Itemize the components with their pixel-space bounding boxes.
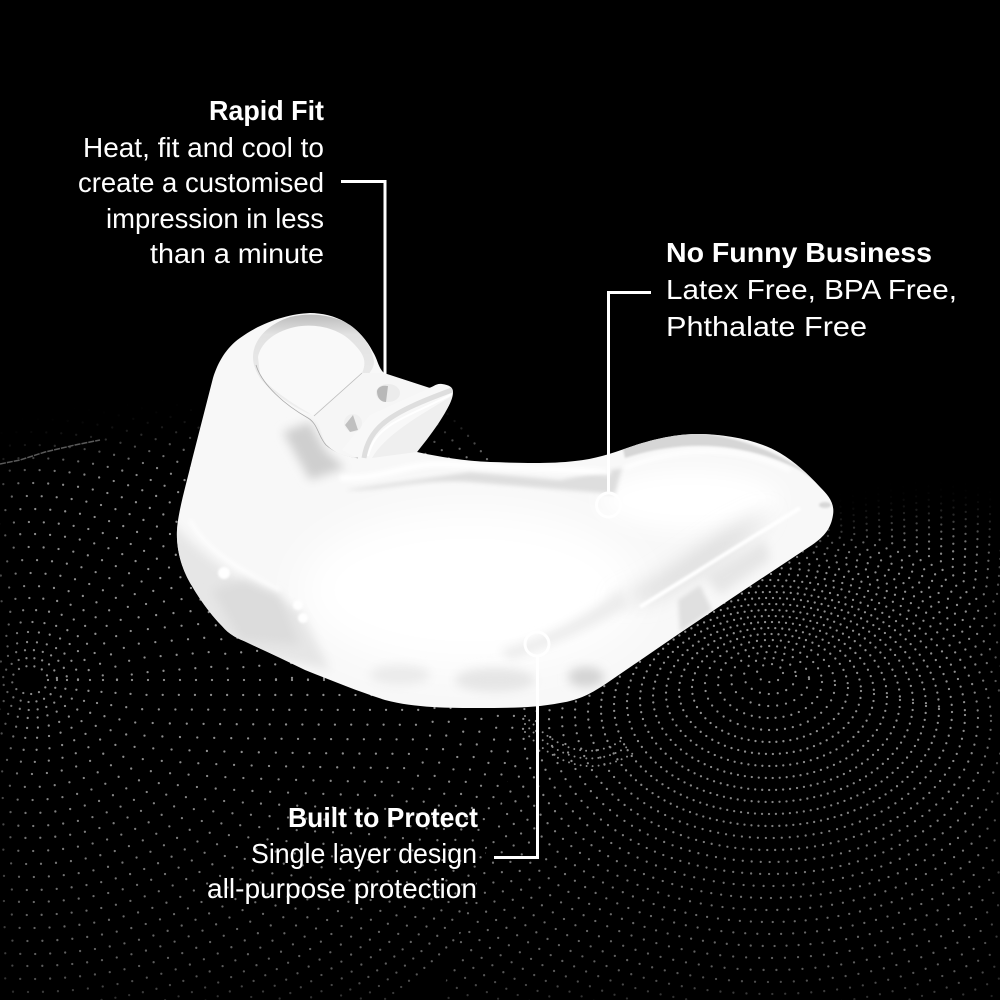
description <box>207 838 477 904</box>
guard silhouette <box>177 313 833 708</box>
dot rings <box>0 413 1000 1000</box>
text block: No Funny Business <box>666 237 957 342</box>
callout: Rapid Fit leader line <box>341 182 385 374</box>
description: create a customised <box>78 167 324 198</box>
description: Phthalate Free <box>666 311 867 342</box>
guard inner cup <box>253 315 452 458</box>
dotted wave terrain <box>0 413 1000 1000</box>
description: Latex Free, BPA Free, <box>666 274 957 305</box>
mouthguard <box>170 313 833 708</box>
bite tab <box>313 373 430 458</box>
description: impression in less <box>106 203 324 234</box>
description: than a minute <box>150 238 324 269</box>
callout: No Funny Business leader line <box>596 292 651 517</box>
heading: No Funny Business <box>666 237 932 268</box>
description <box>666 274 957 342</box>
description <box>78 132 324 269</box>
tab ridge <box>372 396 452 458</box>
heading: Rapid Fit <box>209 95 324 126</box>
description: Single layer design <box>251 838 477 869</box>
heading: Built to Protect <box>288 802 478 833</box>
tab holes <box>376 384 400 402</box>
description: Heat, fit and cool to <box>83 132 324 163</box>
highlights <box>218 567 308 623</box>
description: all-purpose protection <box>207 873 477 904</box>
text block: Built to Protect <box>207 802 478 904</box>
text block: Rapid Fit <box>78 95 324 269</box>
horizon crest line <box>0 440 100 464</box>
callout: Built to Protect leader line <box>494 632 549 858</box>
guard shading <box>170 422 831 692</box>
